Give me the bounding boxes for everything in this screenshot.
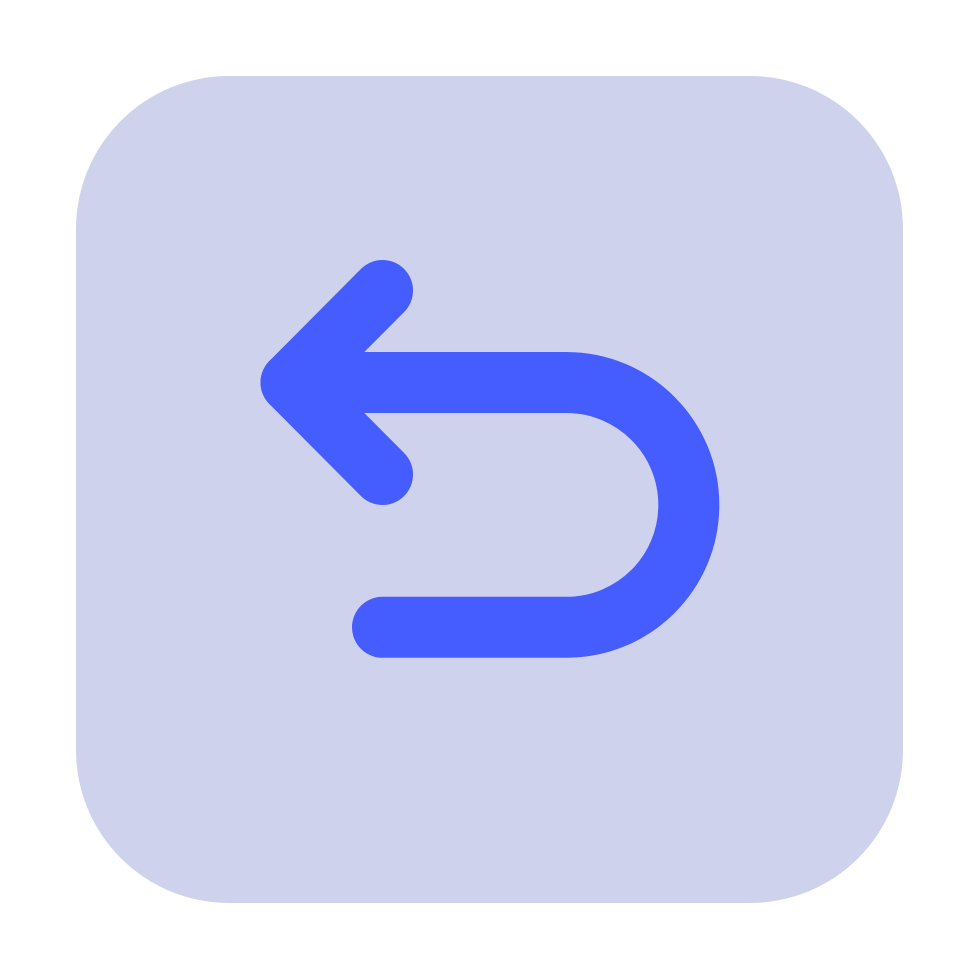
arrow: U-turn left arrow <box>291 290 689 627</box>
panel: rounded square background <box>76 76 903 903</box>
